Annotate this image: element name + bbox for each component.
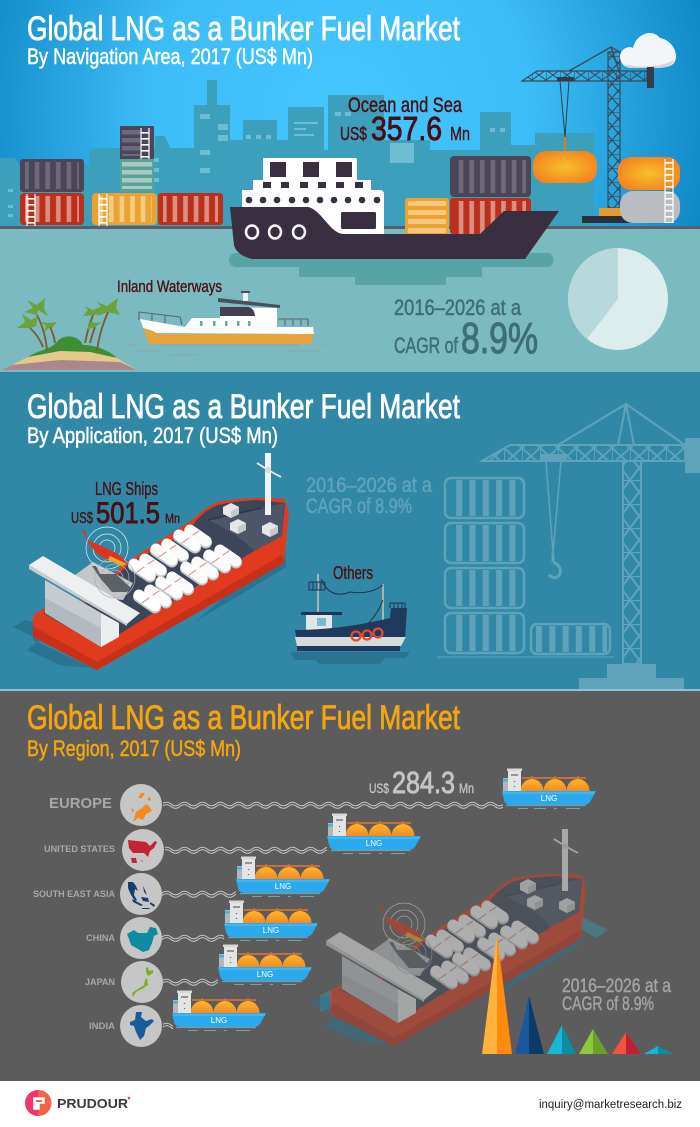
ground line [0,226,700,229]
callout: europe value: 284.3 [392,765,455,800]
icon: island [2,298,137,370]
row: Europe [49,768,596,826]
CAGR callout: 2016–2026 at a [306,474,432,497]
title [27,388,460,448]
callout: LNG ships: LNG Ships [95,479,158,499]
row: South East Asia: SOUTH EAST ASIA [33,889,115,900]
title: By Region, 2017 (US$ Mn) [27,736,241,761]
CAGR callout: CAGR of [394,333,459,358]
right tanks [618,157,680,223]
row: United States: UNITED STATES [44,844,115,855]
callout: ocean and sea: 357.6 [371,110,442,147]
icon: yacht [127,291,327,355]
row: Europe: LNG [541,794,557,803]
CAGR callout: CAGR of 8.9% [562,994,654,1015]
CAGR callout: 2016–2026 at a [394,295,522,320]
callout: ocean and sea: US$ [340,124,367,144]
faded crane [482,404,700,690]
row: China: CHINA [86,933,115,944]
contact email: inquiry@marketresearch.biz [539,1099,682,1111]
callout: europe value: US$ [369,780,389,796]
panel: region [0,691,700,1081]
title: By Navigation Area, 2017 (US$ Mn) [27,44,313,69]
callout: ocean and sea: Ocean and Sea [348,94,462,117]
callout: ocean and sea: Mn [450,124,470,144]
CAGR callout: 2016–2026 at a [562,976,671,997]
title [27,10,460,69]
CAGR callout: CAGR of 8.9% [306,495,412,518]
row: China [86,900,318,959]
hoisted tank [533,151,597,183]
row: India [89,990,266,1047]
title [27,699,460,761]
callout: LNG ships [71,479,180,530]
callout: LNG ships: US$ [71,510,93,527]
row: United States [44,814,421,871]
footer [0,1081,700,1127]
callout: others: Others [333,563,373,583]
panel: navigation area [0,0,700,374]
row: India: INDIA [89,1021,115,1032]
ship shadow [229,253,553,285]
row: Europe: EUROPE [49,795,112,812]
callout: ocean and sea [340,94,470,147]
left container stacks [20,126,223,226]
title: Global LNG as a Bunker Fuel Market [27,388,460,426]
row: China: LNG [263,926,279,935]
callout: europe value: Mn [459,780,474,796]
icon: fishing boat [290,574,410,664]
logo: PRUDOUR [57,1096,129,1111]
main ship [230,158,559,259]
faded ship [310,829,608,1046]
row: South East Asia [33,856,330,915]
row: India: LNG [211,1016,227,1025]
CAGR callout [562,976,671,1015]
logo [25,1090,130,1116]
callout: LNG ships: 501.5 [96,497,160,530]
pie chart [568,248,668,350]
row: Japan: LNG [257,970,273,979]
row: Japan: JAPAN [85,977,115,988]
pyramid chart [482,935,673,1054]
panel: application [0,374,700,690]
faded containers [437,478,614,657]
CAGR callout [306,474,432,518]
big LNG ship [13,453,289,670]
cloud [620,33,676,68]
title: Global LNG as a Bunker Fuel Market [27,699,460,737]
CAGR callout [394,295,538,363]
cargo containers on ship [405,156,531,234]
row: United States: LNG [366,839,382,848]
callout: LNG ships: Mn [165,510,180,526]
crane [522,47,652,223]
callout: inland waterways: Inland Waterways [117,277,222,296]
row: South East Asia: LNG [275,882,291,891]
CAGR callout: 8.9% [461,314,538,363]
crane counterweight [647,67,654,88]
city skyline [0,80,594,226]
row: Japan [85,944,312,1003]
title: Global LNG as a Bunker Fuel Market [27,10,460,48]
title: By Application, 2017 (US$ Mn) [27,423,278,448]
